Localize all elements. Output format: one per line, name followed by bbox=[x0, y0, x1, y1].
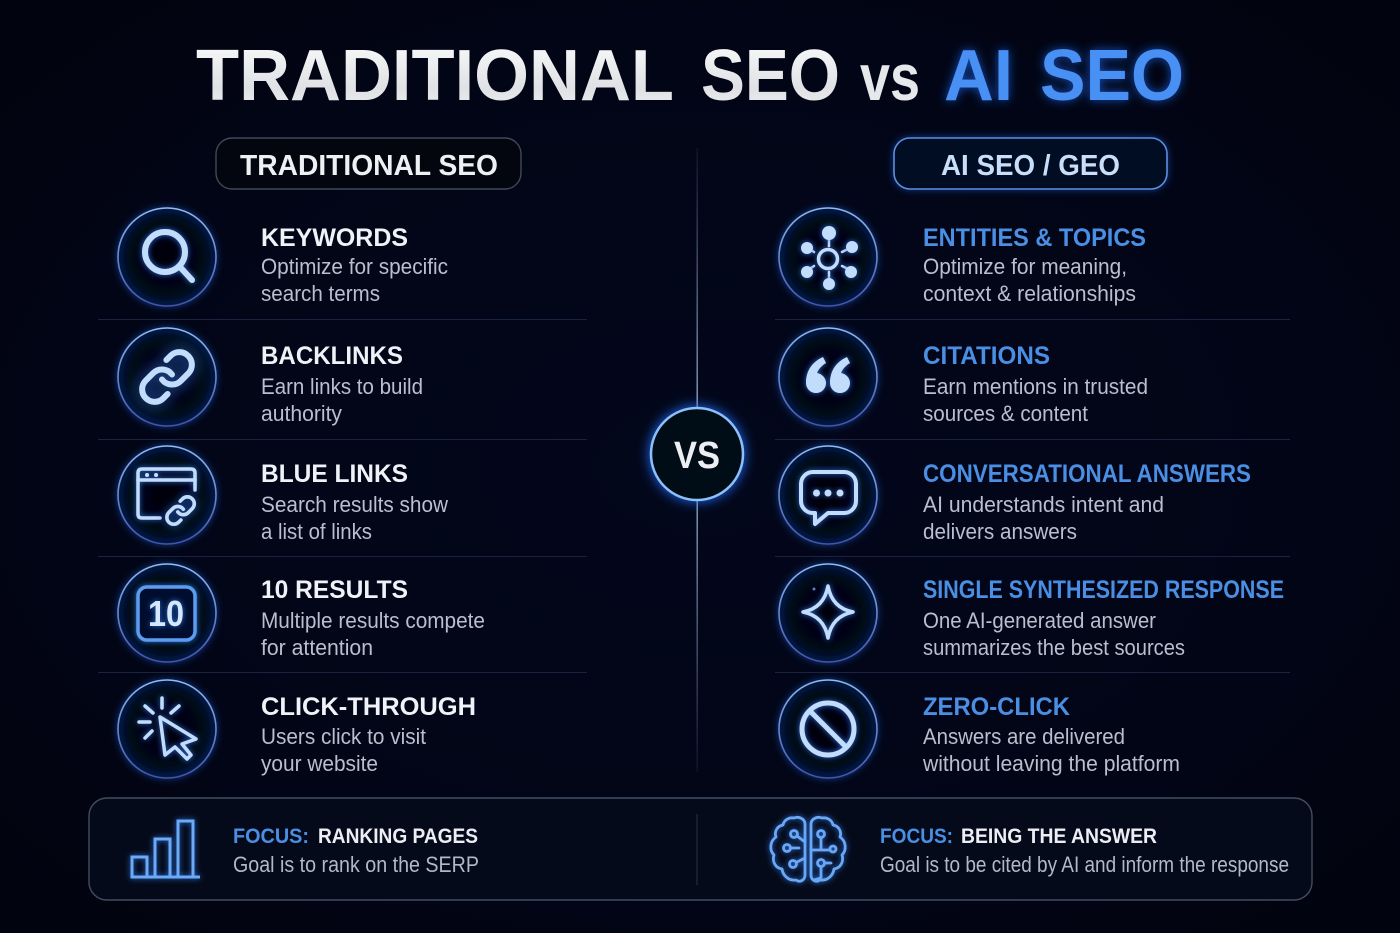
text: citations bbox=[923, 342, 1148, 426]
text: backlinks bbox=[261, 342, 423, 426]
icon: browser window with link bbox=[118, 446, 216, 544]
text: click-through bbox=[261, 693, 476, 776]
text: conversational answers: CONVERSATIONAL ANSWERS bbox=[923, 460, 1251, 488]
text: 10 results: 10 RESULTS bbox=[261, 576, 408, 604]
title: AI bbox=[944, 36, 1013, 116]
text: entities and topics bbox=[923, 224, 1146, 306]
icon: quotation marks bbox=[779, 328, 877, 426]
icon: chain link bbox=[118, 328, 216, 426]
text: keywords: Optimize for specific bbox=[261, 254, 448, 279]
text: keywords bbox=[261, 224, 448, 306]
text: conversational answers: AI understands intent and bbox=[923, 492, 1164, 517]
column header: traditional SEO bbox=[216, 138, 521, 189]
icon: prohibited sign bbox=[779, 680, 877, 778]
title: vs bbox=[860, 40, 920, 114]
text: click-through: your website bbox=[261, 751, 378, 776]
text: 10 results: for attention bbox=[261, 635, 373, 660]
text: focus being the answer: BEING THE ANSWER bbox=[961, 825, 1157, 848]
text: keywords: search terms bbox=[261, 281, 380, 306]
text: conversational answers: delivers answers bbox=[923, 519, 1077, 544]
panel: focus summary bbox=[89, 798, 1312, 900]
text: keywords: KEYWORDS bbox=[261, 224, 408, 252]
icon: entity network bbox=[779, 208, 877, 306]
row: conversational answers bbox=[779, 446, 1251, 544]
text: click-through: Users click to visit bbox=[261, 724, 426, 749]
text: entities and topics: context & relationships bbox=[923, 281, 1136, 306]
icon: bar chart bbox=[131, 821, 200, 877]
icon: cursor click bbox=[118, 680, 216, 778]
title bbox=[196, 36, 1184, 116]
row: backlinks bbox=[118, 328, 423, 426]
row: single synthesized response bbox=[779, 564, 1284, 662]
text: focus being the answer: Goal is to be cited by AI and inform the response bbox=[880, 852, 1289, 877]
text: focus ranking pages: FOCUS: bbox=[233, 825, 309, 848]
text: zero-click: Answers are delivered bbox=[923, 724, 1125, 749]
text: focus ranking pages: Goal is to rank on the SERP bbox=[233, 852, 479, 877]
row: 10 results bbox=[118, 564, 485, 662]
text: citations: Earn mentions in trusted bbox=[923, 374, 1148, 399]
text: blue links: BLUE LINKS bbox=[261, 460, 408, 488]
text: entities and topics: ENTITIES & TOPICS bbox=[923, 224, 1146, 252]
column header: traditional SEO: TRADITIONAL SEO bbox=[240, 150, 498, 182]
text: backlinks: BACKLINKS bbox=[261, 342, 403, 370]
icon: chat bubble bbox=[779, 446, 877, 544]
text: blue links: Search results show bbox=[261, 492, 448, 517]
text: single synthesized response bbox=[923, 576, 1284, 660]
text: click-through: CLICK-THROUGH bbox=[261, 693, 476, 721]
center divider line bbox=[696, 148, 698, 772]
text: backlinks: Earn links to build bbox=[261, 374, 423, 399]
VS badge: VS bbox=[674, 435, 720, 477]
row: keywords bbox=[118, 208, 448, 306]
text: zero-click: ZERO-CLICK bbox=[923, 693, 1070, 721]
text: citations: CITATIONS bbox=[923, 342, 1050, 370]
icon: circuit brain bbox=[771, 817, 845, 881]
icon: magnifying glass bbox=[118, 208, 216, 306]
row: blue links bbox=[118, 446, 448, 544]
text: focus being the answer bbox=[880, 825, 1289, 877]
title: SEO bbox=[701, 36, 840, 116]
text: blue links: a list of links bbox=[261, 519, 372, 544]
text: focus ranking pages bbox=[233, 825, 479, 877]
text: conversational answers bbox=[923, 460, 1251, 544]
text: single synthesized response: One AI-generated answer bbox=[923, 608, 1156, 633]
text: entities and topics: Optimize for meaning, bbox=[923, 254, 1127, 279]
text: single synthesized response: summarizes the best sources bbox=[923, 635, 1185, 660]
column header: AI SEO / GEO: AI SEO / GEO bbox=[941, 150, 1120, 182]
title: SEO bbox=[1040, 36, 1184, 116]
row: citations bbox=[779, 328, 1148, 426]
row dividers bbox=[98, 320, 1290, 672]
text: 10 results bbox=[261, 576, 485, 660]
text: single synthesized response: SINGLE SYNTHESIZED RESPONSE bbox=[923, 576, 1284, 604]
icon: number ten tile bbox=[118, 564, 216, 662]
VS badge bbox=[651, 408, 743, 500]
text: focus being the answer: FOCUS: bbox=[880, 825, 953, 848]
row: entities and topics bbox=[779, 208, 1146, 306]
column header: AI SEO / GEO bbox=[894, 138, 1167, 189]
text: zero-click bbox=[922, 693, 1180, 776]
text: focus ranking pages: RANKING PAGES bbox=[318, 825, 478, 848]
row: click-through bbox=[118, 680, 476, 778]
text: blue links bbox=[261, 460, 448, 544]
icon: four point sparkle bbox=[779, 564, 877, 662]
text: backlinks: authority bbox=[261, 401, 342, 426]
row: zero-click bbox=[779, 680, 1180, 778]
text: 10 results: Multiple results compete bbox=[261, 608, 485, 633]
icon: number ten tile: 10 bbox=[148, 593, 184, 634]
text: citations: sources & content bbox=[923, 401, 1088, 426]
text: zero-click: without leaving the platform bbox=[922, 751, 1180, 776]
title: TRADITIONAL bbox=[196, 36, 674, 116]
